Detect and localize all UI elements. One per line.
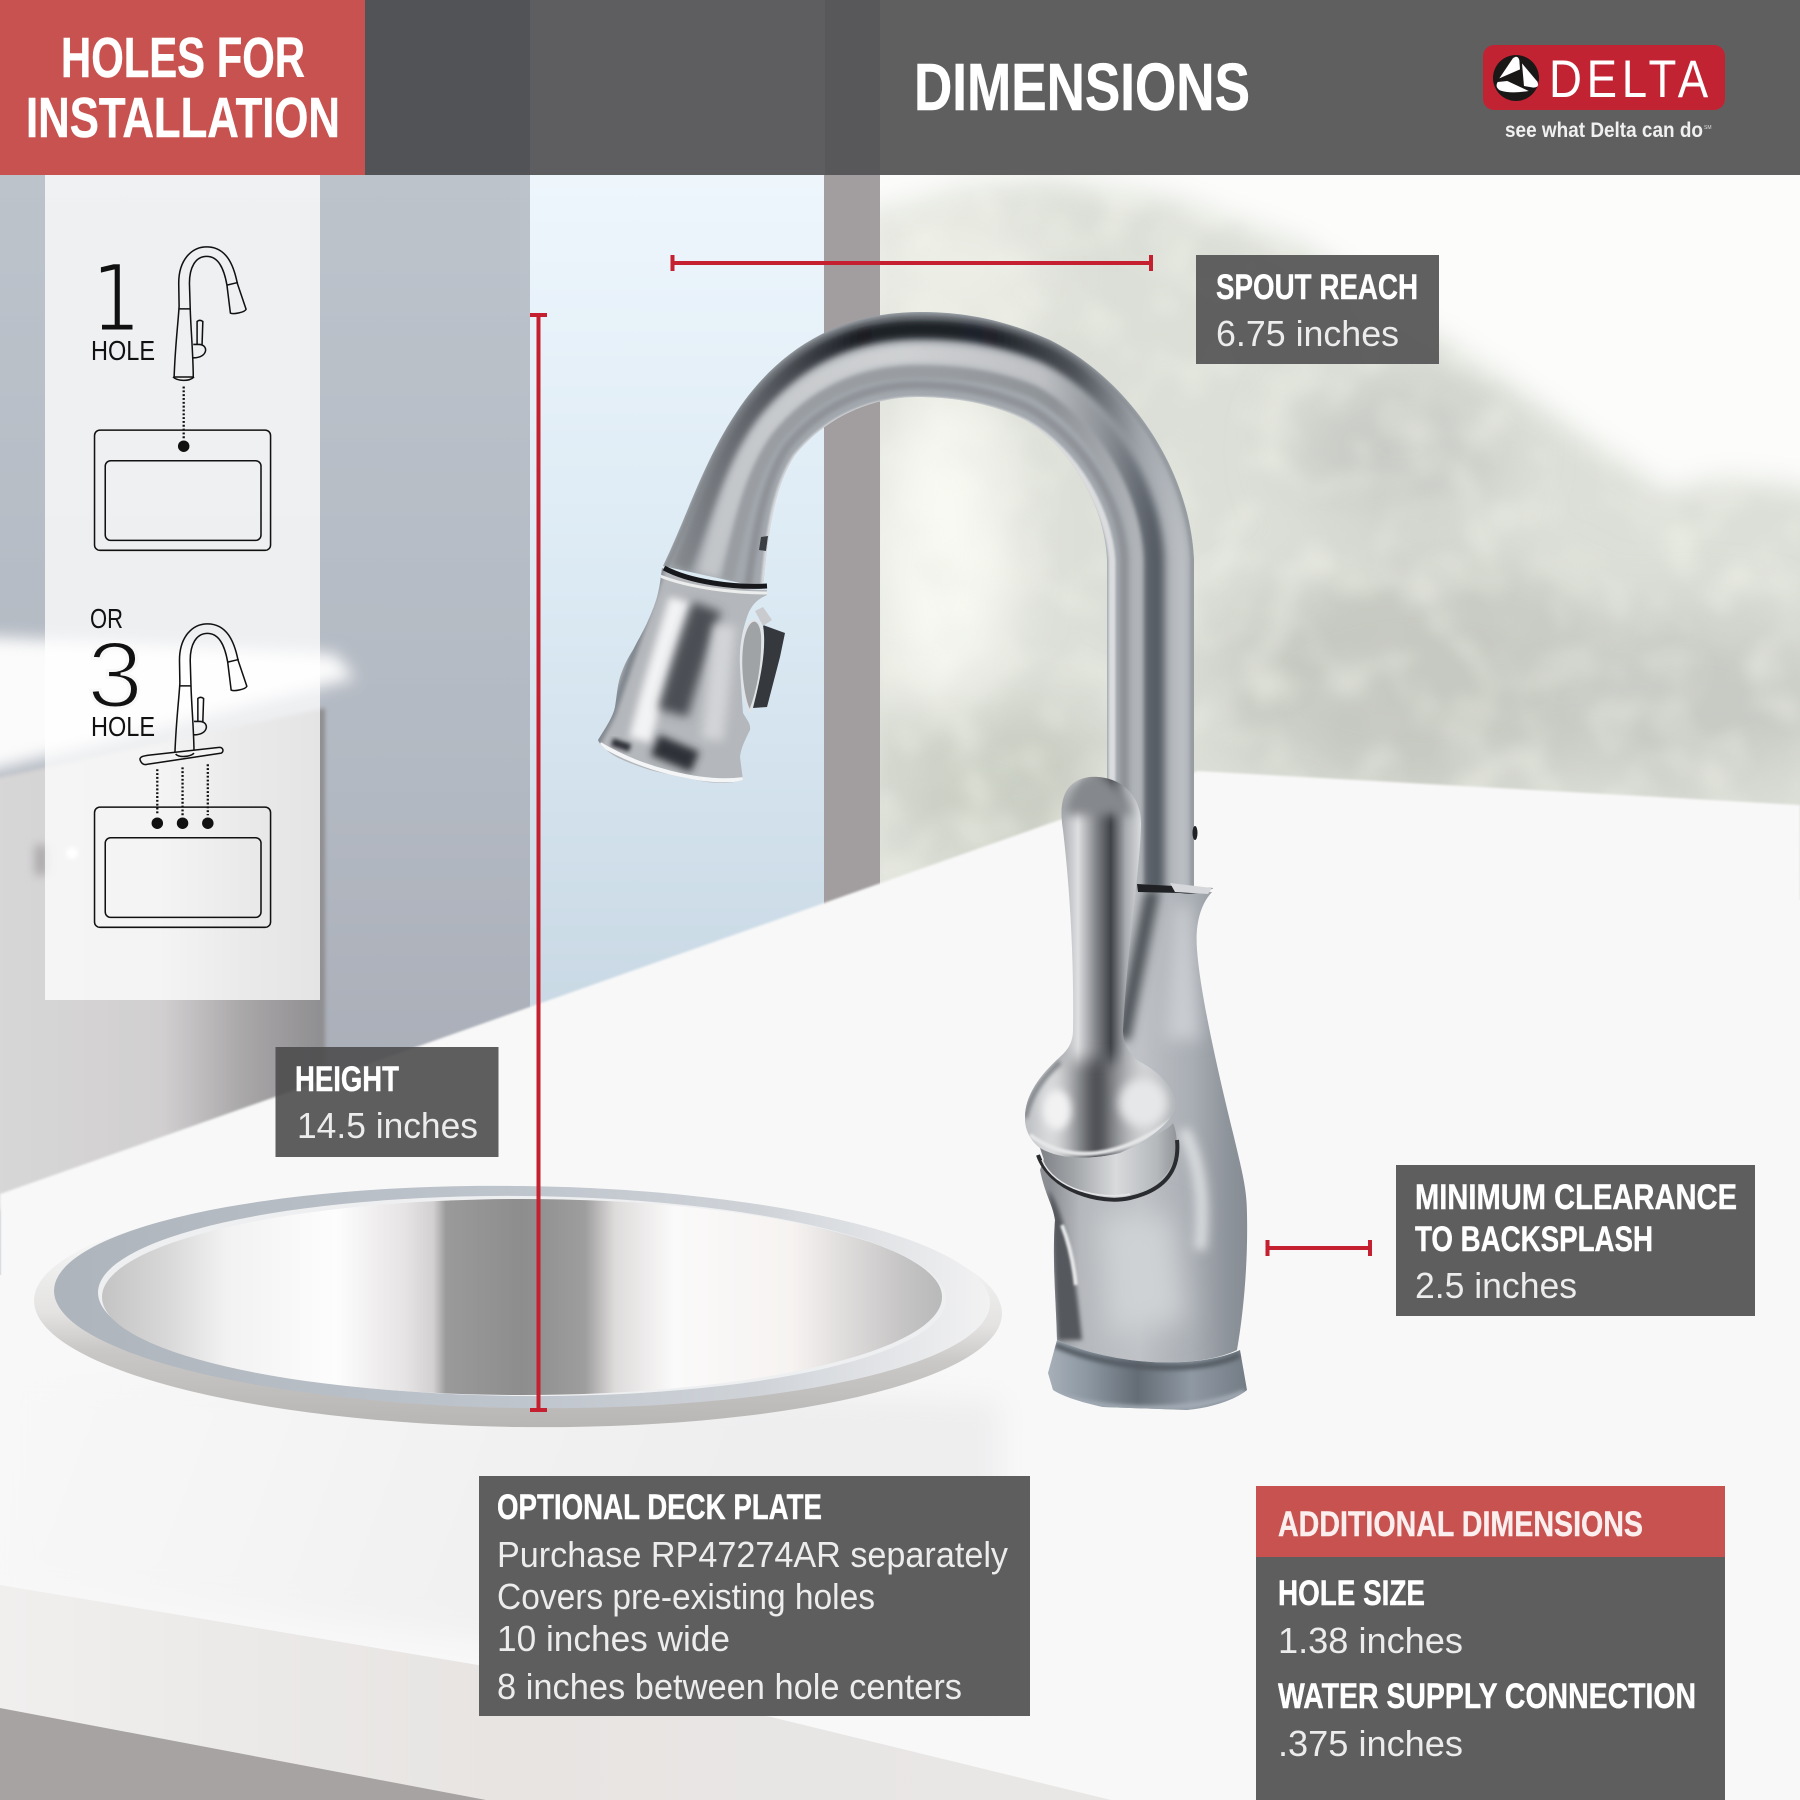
spout: [650, 300, 1210, 910]
panel: additional dimensions: .375 inches: [1278, 1723, 1463, 1764]
panel: hole options: [45, 175, 320, 1000]
callout: minimum clearance: 2.5 inches: [1415, 1265, 1577, 1306]
callout: spout reach: [1196, 255, 1439, 364]
handle: [1025, 776, 1175, 1158]
spout pin and sensor dot: [759, 536, 1198, 840]
three hole label: 3: [87, 622, 143, 727]
one hole label: HOLE: [91, 335, 155, 366]
callout: minimum clearance: [1396, 1165, 1755, 1316]
callout: height: HEIGHT: [295, 1060, 399, 1099]
panel: additional dimensions: HOLE SIZE: [1278, 1574, 1425, 1613]
three hole label: HOLE: [91, 711, 155, 742]
callout: spout reach: 6.75 inches: [1216, 313, 1399, 354]
callout: optional deck plate: 8 inches between hole centers: [497, 1666, 962, 1707]
callout: optional deck plate: 10 inches wide: [497, 1618, 730, 1659]
callout: minimum clearance: TO BACKSPLASH: [1415, 1220, 1653, 1259]
heading panel: holes for installation: HOLES FOR: [61, 26, 305, 90]
dimension line: height: [530, 315, 547, 1410]
faucet body: [1040, 880, 1260, 1380]
faucet: [590, 300, 1260, 1420]
callout: optional deck plate: Purchase RP47274AR separately: [497, 1534, 1008, 1575]
callout: optional deck plate: [479, 1476, 1030, 1716]
three hole label: OR: [90, 603, 123, 634]
callout: height: 14.5 inches: [297, 1105, 478, 1146]
logo: delta: DELTA: [1549, 50, 1708, 109]
three hole label: [87, 603, 155, 742]
callout: optional deck plate: OPTIONAL DECK PLATE: [497, 1488, 822, 1527]
spray button: [741, 607, 785, 711]
title: dimensions: DIMENSIONS: [914, 50, 1250, 125]
heading panel: holes for installation: [0, 0, 365, 175]
heading panel: holes for installation: INSTALLATION: [26, 86, 340, 150]
icon: three hole faucet, deck plate and sink: [95, 624, 271, 927]
header bar: [0, 0, 1800, 175]
dimension line: backsplash clearance: [1267, 1240, 1370, 1256]
panel: additional dimensions: ADDITIONAL DIMENSIONS: [1278, 1505, 1643, 1544]
logo: delta: [1483, 45, 1725, 142]
panel: additional dimensions: [1256, 1486, 1725, 1800]
panel: additional dimensions: 1.38 inches: [1278, 1620, 1463, 1661]
swivel ring and collar: [1038, 1123, 1177, 1200]
sink bowl: [32, 1179, 1004, 1434]
logo: delta: see what Delta can do: [1505, 119, 1703, 142]
panel: additional dimensions: WATER SUPPLY CONNECTION: [1278, 1677, 1696, 1716]
base ring: [1048, 1340, 1247, 1410]
dimension line: spout reach: [672, 255, 1151, 271]
callout: optional deck plate: Covers pre-existing holes: [497, 1576, 875, 1617]
spray head: [590, 560, 785, 790]
callout: minimum clearance: MINIMUM CLEARANCE: [1415, 1178, 1737, 1217]
icon: one hole faucet and sink: [95, 247, 271, 550]
callout: height: [276, 1047, 498, 1157]
logo: delta: SM: [1704, 125, 1712, 131]
one hole label: 1: [91, 245, 141, 354]
callout: spout reach: SPOUT REACH: [1216, 268, 1418, 307]
window view: trees: [830, 175, 1800, 900]
